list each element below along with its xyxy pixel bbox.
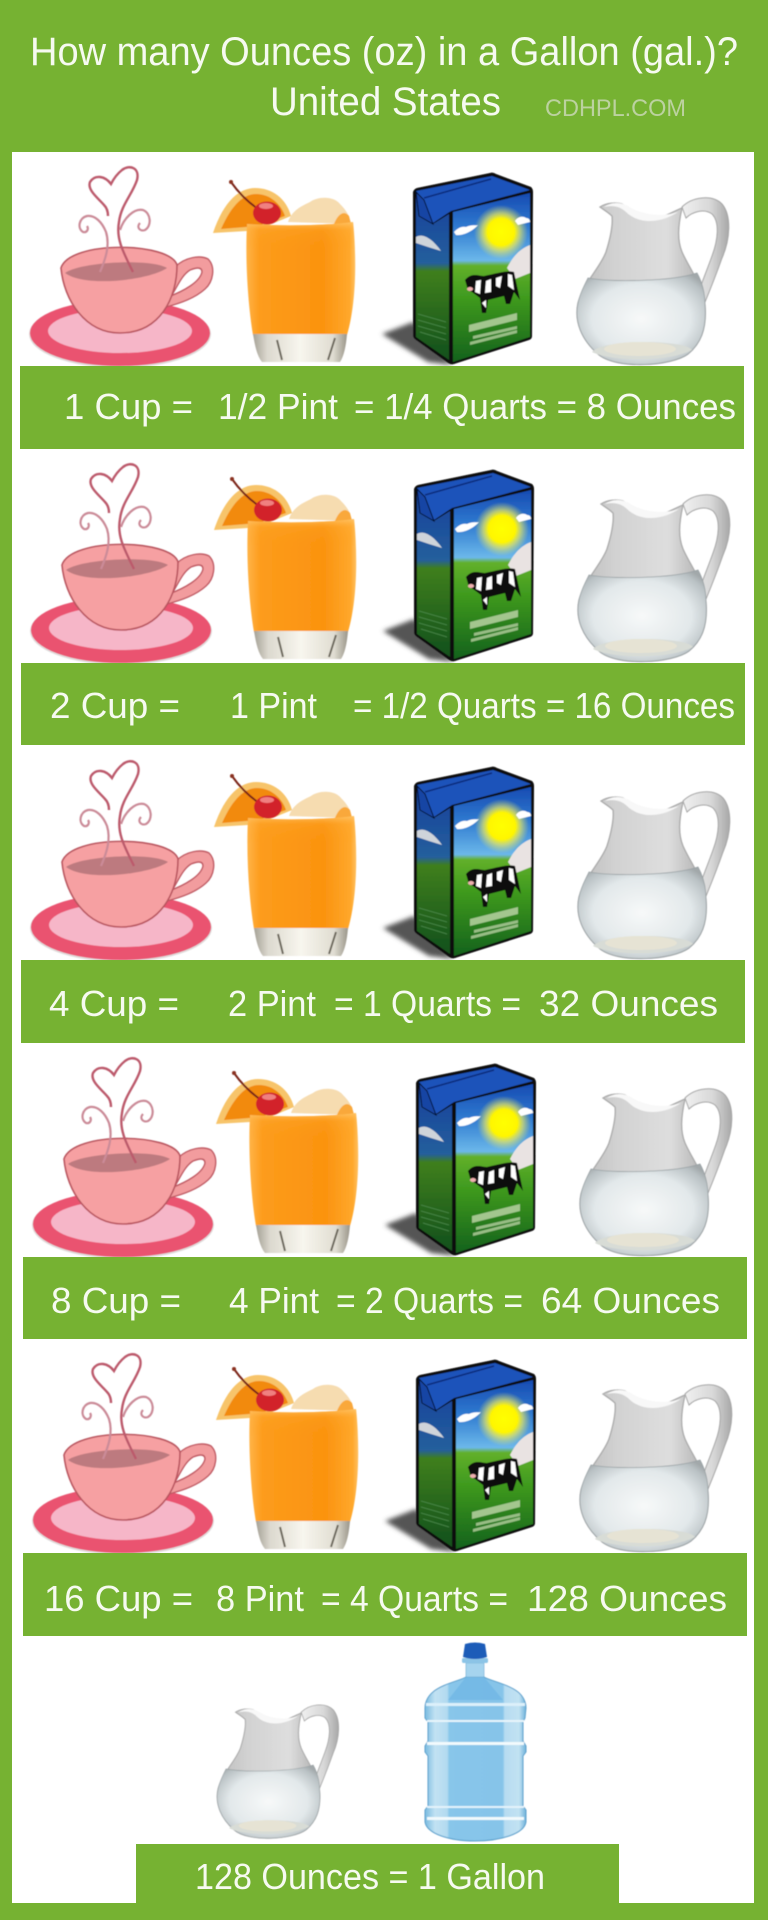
band: 4 cup equivalents: = 1 Quarts = [334, 983, 521, 1024]
band: 2 cup equivalents: 2 Cup = [50, 685, 180, 726]
band: 128 ounces equals 1 gallon [136, 1844, 619, 1904]
title [30, 30, 738, 124]
icons: cup, juice, milk carton, pitcher [30, 761, 730, 962]
band: 16 cup equivalents: 128 Ounces [527, 1578, 727, 1619]
band: 16 cup equivalents: 16 Cup = [44, 1578, 193, 1619]
icons: cup, juice, milk carton, pitcher [32, 1354, 732, 1555]
title: United States [270, 80, 501, 124]
icons: cup, juice, milk carton, pitcher [32, 1058, 732, 1259]
band: 4 cup equivalents: 4 Cup = [49, 983, 179, 1024]
band: 16 cup equivalents: = 4 Quarts = [321, 1578, 508, 1619]
band: 1 cup equivalents: = 1/4 Quarts = 8 Ounces [354, 386, 736, 427]
panel: row 3, 4 cups [21, 761, 745, 1043]
band: 8 cup equivalents: 4 Pint [229, 1280, 319, 1321]
band: 2 cup equivalents [21, 663, 745, 745]
band: 1 cup equivalents: 1/2 Pint [218, 386, 338, 427]
panel: row 5, 16 cups [23, 1354, 747, 1636]
band: 8 cup equivalents: 8 Cup = [51, 1280, 181, 1321]
band: 4 cup equivalents: 2 Pint [228, 983, 316, 1024]
band: 8 cup equivalents [23, 1257, 747, 1339]
band: 8 cup equivalents: 64 Ounces [541, 1280, 720, 1321]
icons: cup, juice, milk carton, pitcher [29, 167, 729, 368]
panel: row 4, 8 cups [23, 1058, 747, 1339]
watermark: CDHPL.COM: CDHPL.COM [545, 95, 686, 122]
panel: gallon summary [136, 1642, 619, 1904]
band: 2 cup equivalents: 1 Pint [230, 685, 317, 726]
band: 1 cup equivalents [20, 366, 744, 449]
band: 4 cup equivalents [21, 960, 745, 1043]
band: 4 cup equivalents: 32 Ounces [539, 983, 718, 1024]
panel: row 1, 1 cup [20, 167, 744, 449]
band: 1 cup equivalents: 1 Cup = [64, 386, 193, 427]
band: 2 cup equivalents: = 1/2 Quarts = 16 Ounces [353, 685, 735, 726]
band: 16 cup equivalents [23, 1553, 747, 1636]
panel: row 2, 2 cups [21, 464, 745, 745]
icon: water bottle [425, 1642, 526, 1841]
band: 128 ounces equals 1 gallon: 128 Ounces = 1 Gallon [195, 1856, 545, 1897]
band: 16 cup equivalents: 8 Pint [216, 1578, 304, 1619]
icon: pitcher [217, 1705, 339, 1838]
band: 8 cup equivalents: = 2 Quarts = [336, 1280, 523, 1321]
title: How many Ounces (oz) in a Gallon (gal.)? [30, 30, 738, 74]
icons: cup, juice, milk carton, pitcher [30, 464, 730, 665]
